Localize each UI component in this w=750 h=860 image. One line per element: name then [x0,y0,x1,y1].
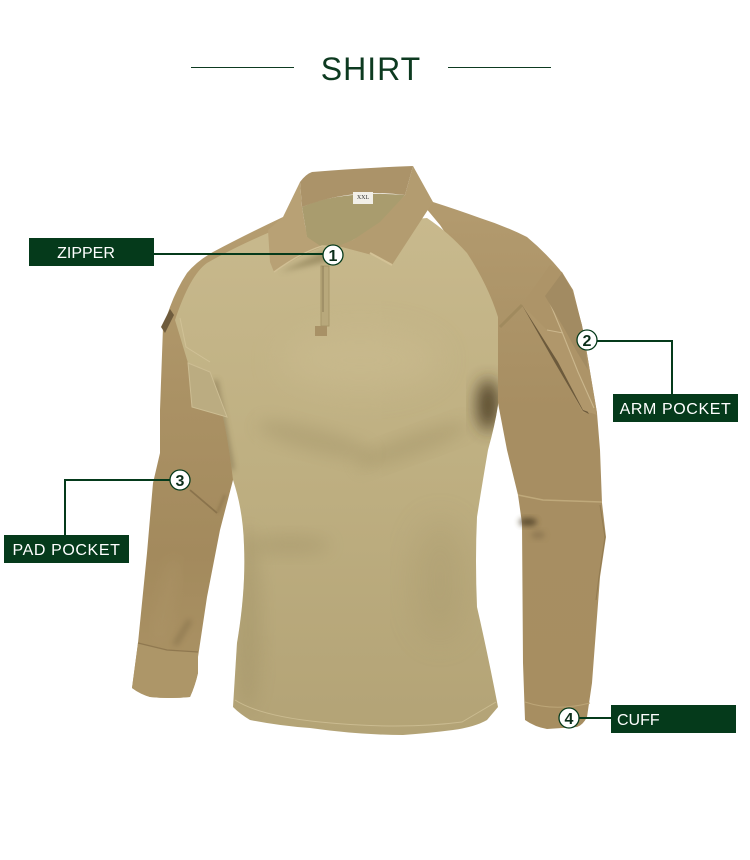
callout 4: cuff [559,705,736,733]
inner neck [302,194,405,247]
right sleeve [415,195,606,729]
collar shadow on chest [280,252,340,272]
callout 1: zipper: ZIPPER [57,245,115,262]
callout 2: arm pocket: ARM POCKET [620,401,731,418]
collar [268,166,433,272]
shirt illustration [132,166,606,735]
callout 4: cuff: CUFF [617,712,660,729]
size tag [353,192,373,204]
size tag: XXL [357,195,369,201]
torso [175,218,499,735]
underarm panel [188,363,227,417]
back band [300,166,413,207]
callout 1: zipper: 1 [329,248,338,265]
callout 1: zipper [29,238,343,266]
callout 4: cuff: 4 [565,711,574,728]
left flap [268,182,322,272]
callout 2: arm pocket: 2 [583,333,592,350]
arm pocket [522,265,597,415]
right flap [338,166,433,265]
callout 2: arm pocket [577,330,738,422]
left sleeve [132,217,283,698]
callout 3: pad pocket: PAD POCKET [13,542,120,559]
callout 3: pad pocket [4,470,190,563]
title: SHIRT: SHIRT [321,51,421,87]
callout 3: pad pocket: 3 [176,473,185,490]
zipper placket [315,266,329,336]
